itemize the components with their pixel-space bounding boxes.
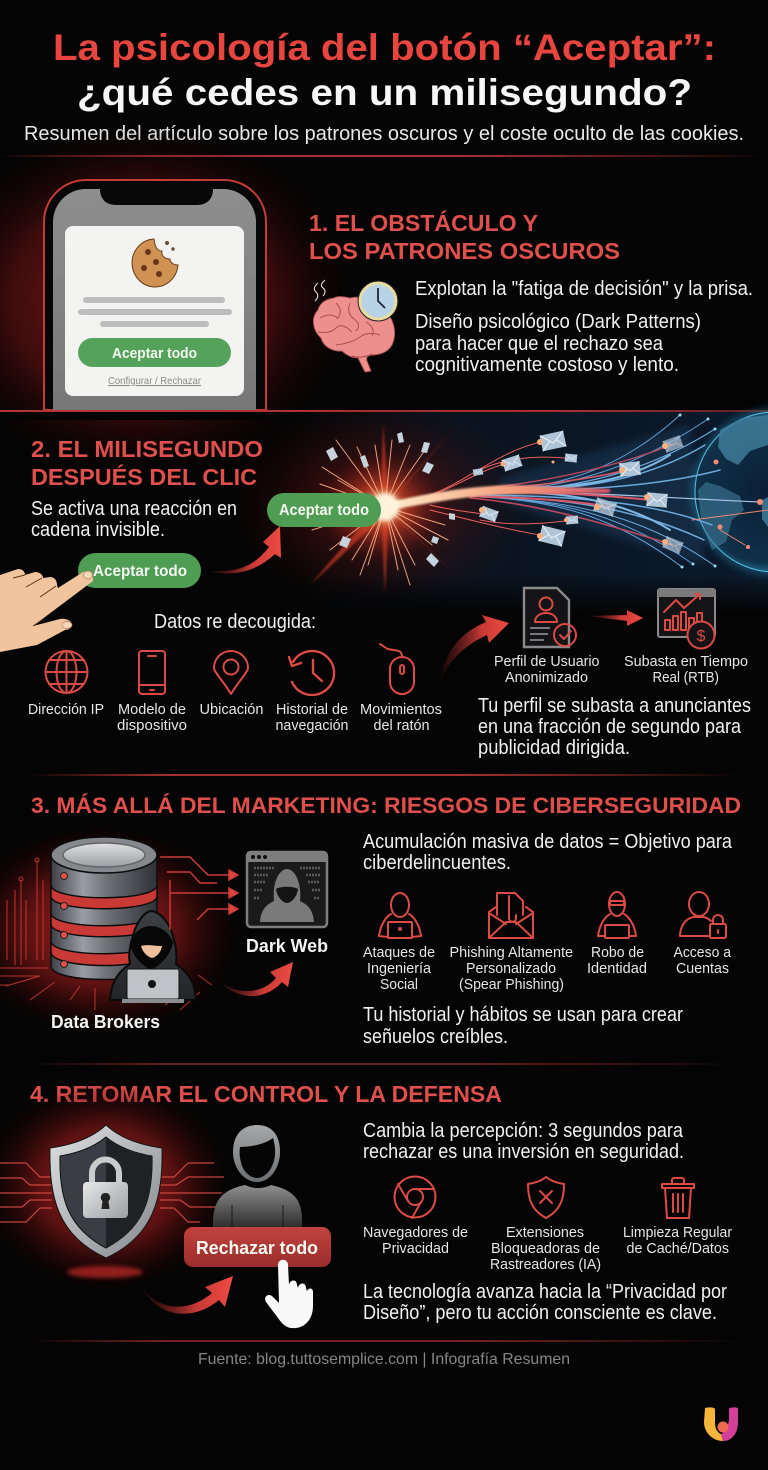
icon: real-time auction chart: $: [697, 628, 706, 645]
title block: [24, 27, 744, 145]
label: account access: Acceso a: [674, 944, 732, 961]
text: profile auctioned: en una fracción de segundo para: [478, 716, 742, 738]
icon: hand cursor: [265, 1260, 313, 1328]
icon: dark web window: [247, 852, 327, 927]
button: accept all top: [267, 493, 381, 527]
heading: section 1: LOS PATRONES OSCUROS: [309, 238, 620, 264]
label: dark web: Dark Web: [246, 936, 328, 956]
heading: section 2: 2. EL MILISEGUNDO: [31, 436, 263, 462]
text: massive accumulation: [363, 831, 733, 874]
label: data brokers: Data Brokers: [51, 1012, 160, 1032]
arrow: profile to auction: [587, 610, 643, 626]
label: cache cleaning: [623, 1224, 732, 1257]
label: location: Ubicación: [200, 701, 264, 718]
icon: private browser: [394, 1176, 436, 1218]
text: chain reaction: Se activa una reacción en: [31, 498, 237, 520]
database: [51, 837, 157, 980]
label: anonymised user profile: Perfil de Usuario: [494, 653, 600, 670]
label: anonymised user profile: [494, 653, 600, 686]
link: configure or reject: Configurar / Rechazar: [108, 375, 201, 387]
label: identity theft: Identidad: [587, 960, 647, 977]
icon: globe: [46, 651, 88, 693]
illustration: user silhouette: [213, 1125, 302, 1227]
footer source: Fuente: blog.tuttosemplice.com | Infografía Resumen: [198, 1351, 570, 1368]
label: social engineering attacks: Ingeniería: [367, 960, 432, 977]
icon: cookie: [132, 239, 178, 287]
label: mouse movements: del ratón: [374, 717, 430, 734]
button: accept all bottom: [78, 553, 201, 588]
label: privacy browsers: Navegadores de: [363, 1224, 468, 1241]
label: spear phishing: (Spear Phishing): [459, 976, 564, 993]
icon: user profile document: [524, 588, 576, 647]
icon: mouse: [380, 644, 414, 694]
label: browsing history: Historial de: [276, 701, 348, 718]
text: believable lures: [363, 1004, 683, 1048]
text: data collected heading: Datos re decougida:: [154, 611, 316, 633]
button: accept all: Aceptar todo: [112, 345, 197, 362]
icon: blocker shield: [528, 1177, 564, 1218]
label: social engineering attacks: Social: [380, 976, 418, 993]
text: profile auctioned: publicidad dirigida.: [478, 737, 630, 759]
text: believable lures: señuelos creíbles.: [363, 1026, 508, 1048]
text: privacy by design: Diseño”, pero tu acción consciente es clave.: [363, 1302, 717, 1324]
text: change perception: Cambia la percepción: 3 segundos para: [363, 1120, 684, 1142]
text: change perception: rechazar es una inversión en seguridad.: [363, 1141, 684, 1163]
button: accept all top: Aceptar todo: [279, 502, 369, 519]
illustration: phone with cookie banner: [44, 180, 266, 410]
label: privacy browsers: [363, 1224, 468, 1257]
label: device model: Modelo de: [118, 701, 186, 718]
label: account access: Cuentas: [676, 960, 729, 977]
label: IP address: Dirección IP: [28, 701, 104, 718]
text: dark patterns: para hacer que el rechazo sea: [415, 333, 664, 355]
button: reject all: [184, 1227, 331, 1267]
icon: phishing envelope: [489, 893, 533, 938]
text: chain reaction: [31, 498, 237, 541]
label: browsing history: navegación: [276, 717, 348, 734]
label: mouse movements: Movimientos: [360, 701, 442, 718]
icon: pointing hand: [0, 569, 93, 652]
arrow: to reject button: [142, 1276, 233, 1314]
icon: trash can: [662, 1178, 694, 1218]
label: spear phishing: Personalizado: [466, 960, 556, 977]
icon: history clock: [289, 651, 334, 695]
panel: section 3: [0, 793, 741, 1048]
panel: section 4: [0, 1080, 732, 1328]
label: anonymised user profile: Anonimizado: [505, 669, 588, 686]
text: privacy by design: [363, 1281, 727, 1324]
label: device model: [117, 701, 187, 734]
heading: section 1: 1. EL OBSTÁCULO Y: [309, 209, 538, 236]
label: spear phishing: [450, 944, 573, 993]
subtitle: Resumen del artículo sobre los patrones oscuros y el coste oculto de las cookies.: [24, 123, 744, 145]
arrow: to top button: [209, 526, 281, 573]
icon: brain with clock: [313, 280, 398, 372]
label: mouse movements: [360, 701, 442, 734]
hacker: [110, 911, 196, 1000]
text: massive accumulation: Acumulación masiva de datos = Objetivo para: [363, 831, 733, 853]
text: dark patterns: cognitivamente costoso y lento.: [415, 354, 679, 376]
heading: section 2: [31, 436, 263, 490]
label: real-time auction: Real (RTB): [652, 669, 719, 686]
text: massive accumulation: ciberdelincuentes.: [363, 852, 511, 874]
heading: section 2: DESPUÉS DEL CLIC: [31, 463, 257, 490]
label: tracker blocking extensions: [490, 1224, 601, 1273]
envelopes: [473, 431, 684, 554]
label: cache cleaning: de Caché/Datos: [626, 1240, 729, 1257]
label: tracker blocking extensions: Extensiones: [506, 1224, 584, 1241]
button: accept all bottom: Aceptar todo: [93, 563, 187, 580]
illustration: data explosion and globe: [230, 400, 768, 613]
text: chain reaction: cadena invisible.: [31, 519, 165, 541]
text: dark patterns: [415, 311, 701, 376]
streams: [420, 415, 768, 567]
label: real-time auction: Subasta en Tiempo: [624, 653, 748, 670]
label: social engineering attacks: Ataques de: [363, 944, 435, 961]
label: account access: [674, 944, 732, 977]
label: social engineering attacks: [363, 944, 435, 993]
text: privacy by design: La tecnología avanza hacia la “Privacidad por: [363, 1281, 727, 1303]
button: accept all: [78, 338, 231, 367]
logo: [704, 1407, 738, 1441]
text: profile auctioned: [478, 695, 751, 759]
label: tracker blocking extensions: Rastreadores (IA): [490, 1256, 601, 1273]
label: browsing history: [276, 701, 348, 734]
text: change perception: [363, 1120, 684, 1163]
icon: real-time auction chart: [658, 589, 715, 648]
label: tracker blocking extensions: Bloqueadoras de: [491, 1240, 600, 1257]
arrows: data flow to dark web: [160, 857, 238, 930]
title line 2: ¿qué cedes en un milisegundo?: [77, 72, 692, 113]
panel: section 1: [0, 125, 768, 475]
label: device model: dispositivo: [117, 717, 187, 734]
label: real-time auction: [624, 653, 748, 686]
arrow: brokers to dark web: [218, 962, 293, 996]
panel: section 2: [0, 400, 768, 759]
icon: social engineering: [379, 893, 421, 938]
icon: location pin: [214, 651, 248, 694]
illustration: data brokers database and hacker: [0, 825, 240, 1035]
label: spear phishing: Phishing Altamente: [450, 944, 573, 961]
arrow: to user profile: [441, 615, 509, 678]
title line 1: La psicología del botón “Aceptar”:: [53, 27, 716, 68]
icon: phone: [139, 651, 165, 694]
button: reject all: Rechazar todo: [196, 1238, 318, 1258]
label: identity theft: [587, 944, 647, 977]
text: dark patterns: Diseño psicológico (Dark Patterns): [415, 311, 701, 333]
illustration: shield with padlock: [0, 1080, 231, 1290]
label: privacy browsers: Privacidad: [382, 1240, 449, 1257]
heading: section 1: [309, 209, 620, 264]
heading: section 3: 3. MÁS ALLÁ DEL MARKETING: RIESGOS DE CIBERSEGURIDAD: [31, 793, 741, 818]
label: cache cleaning: Limpieza Regular: [623, 1224, 732, 1241]
heading: section 4: 4. RETOMAR EL CONTROL Y LA DEFENSA: [30, 1081, 502, 1107]
label: identity theft: Robo de: [591, 944, 644, 961]
icon: account access: [680, 892, 726, 938]
text: believable lures: Tu historial y hábitos se usan para crear: [363, 1004, 683, 1026]
icon: identity theft: [598, 892, 636, 938]
